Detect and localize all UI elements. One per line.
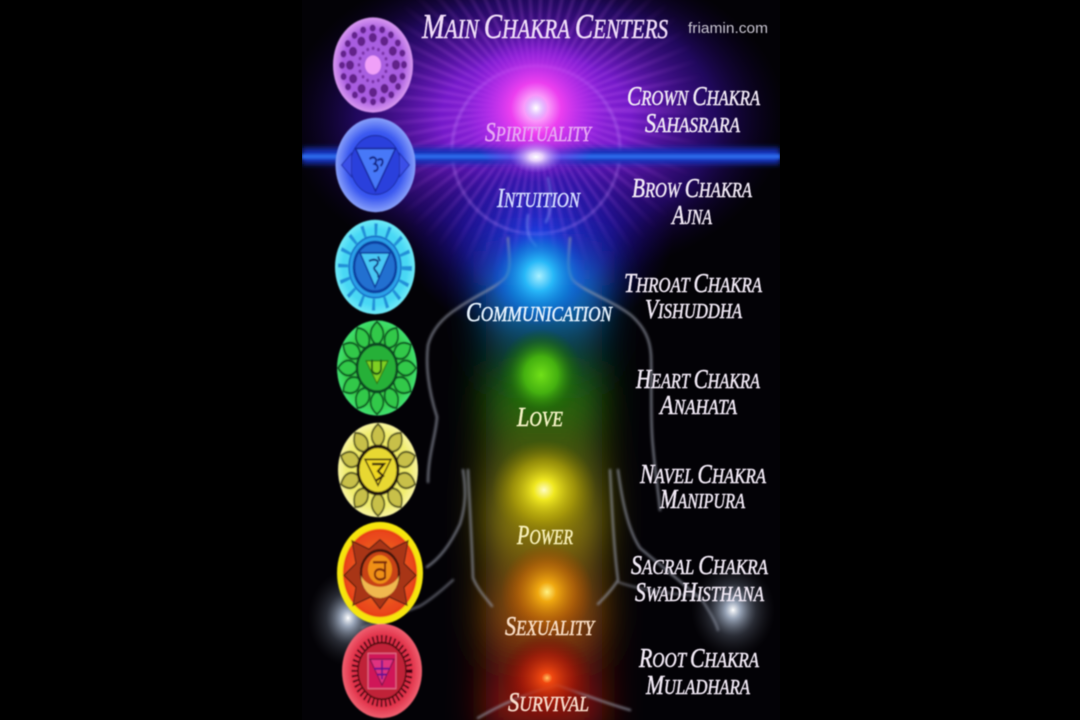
chakra name labels: SAHASRARA [645,108,740,138]
seven body chakra glows [474,40,598,712]
chakra symbol column [333,17,423,718]
chakra name labels: BROW CHAKRA [632,173,752,203]
body centre labels: LOVE [516,402,563,432]
chakra name labels: MULADHARA [645,670,750,700]
icon: navel chakra [338,423,418,517]
body centre labels [466,117,613,717]
chakra name labels [624,81,768,700]
chakra name labels: SWADHISTHANA [635,577,764,607]
chakra name labels: MANIPURA [659,484,745,514]
chakra name labels: ANAHATA [658,390,737,420]
central poster panel [286,0,786,720]
icon: throat chakra [335,220,415,314]
icon: sacral chakra [337,522,423,624]
body centre labels: SURVIVAL [508,687,589,717]
chakra name labels: VISHUDDHA [645,294,742,324]
chakra name labels: ROOT CHAKRA [638,643,759,673]
title: MAIN CHAKRA CENTERS [421,7,668,46]
chakra name labels: HEART CHAKRA [635,364,760,394]
purple aura around the head [302,0,774,322]
chakra name labels: CROWN CHAKRA [627,81,760,111]
horizontal blue light streak [302,148,780,164]
icon: heart chakra [337,320,417,416]
icon: root chakra [342,624,422,718]
source credit: friamin.com [688,20,768,37]
chakra name labels: AJNA [670,200,712,230]
body centre labels: INTUITION [496,183,581,213]
body centre labels: SEXUALITY [505,611,596,641]
body centre labels: SPIRITUALITY [485,117,593,147]
chakra name labels: NAVEL CHAKRA [639,459,766,489]
body centre labels: POWER [516,520,573,550]
energy column along the spine [486,250,602,720]
body centre labels: COMMUNICATION [466,297,613,327]
glowing palms [314,568,770,658]
chakra name labels: SACRAL CHAKRA [631,550,768,580]
chakra name labels: THROAT CHAKRA [624,268,762,298]
icon: brow chakra [336,118,416,212]
icon: crown chakra [333,17,413,113]
meditating figure outline [362,178,718,718]
